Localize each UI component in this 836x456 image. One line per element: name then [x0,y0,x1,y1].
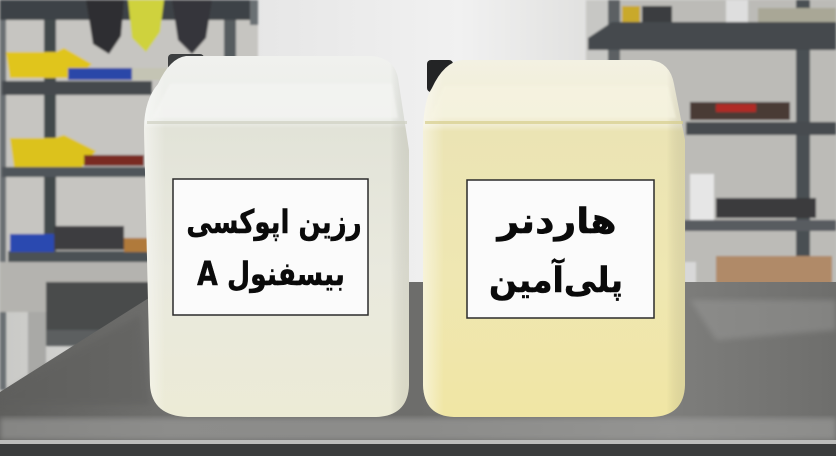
shelf items [6,48,92,78]
liquid line [425,121,683,124]
shoulder highlight [152,84,398,118]
shelf items [622,6,640,22]
label text line 1: هاردنر [495,200,617,242]
label [467,180,654,318]
left shelving unit [0,0,258,390]
gloves [86,0,124,54]
can body [144,56,409,417]
label text line 1: رزین اپوکسی [186,203,362,242]
label text line 2: پلی‌آمین [489,258,623,301]
right jerrycan: polyamine hardener [423,60,685,417]
liquid line [147,121,407,124]
left jerrycan: epoxy resin [144,54,409,417]
can body [423,60,685,417]
shoulder highlight [430,86,676,118]
can cap [168,54,204,74]
label text line 2: بیسفنول A [197,255,345,294]
label [173,179,368,315]
steel table top [0,282,836,456]
table edge [0,442,836,456]
can cap [427,60,453,92]
right shelving unit [586,0,836,285]
